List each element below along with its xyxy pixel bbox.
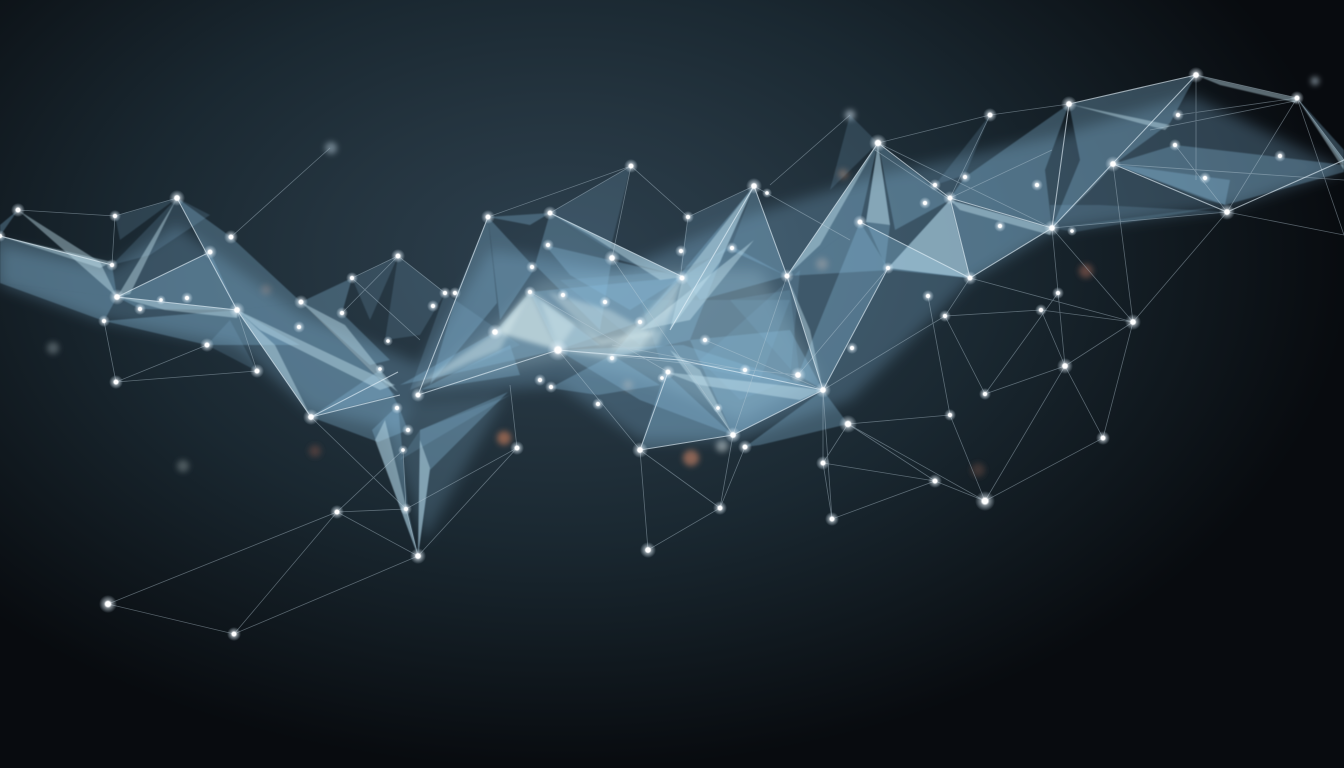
faint wide mesh facets	[112, 115, 1230, 460]
thin connecting lines	[18, 75, 1344, 634]
bright streaks	[0, 75, 1344, 556]
bright ridge lines	[0, 75, 1344, 450]
centre body	[400, 292, 600, 385]
bright core facets	[410, 275, 683, 390]
out-of-focus background nodes	[47, 77, 1319, 477]
soft glow behind mesh body	[0, 95, 1344, 540]
down spike	[418, 392, 508, 556]
translucent mesh facets	[0, 75, 1344, 556]
glowing nodes	[0, 67, 1304, 641]
left wing	[0, 236, 117, 297]
